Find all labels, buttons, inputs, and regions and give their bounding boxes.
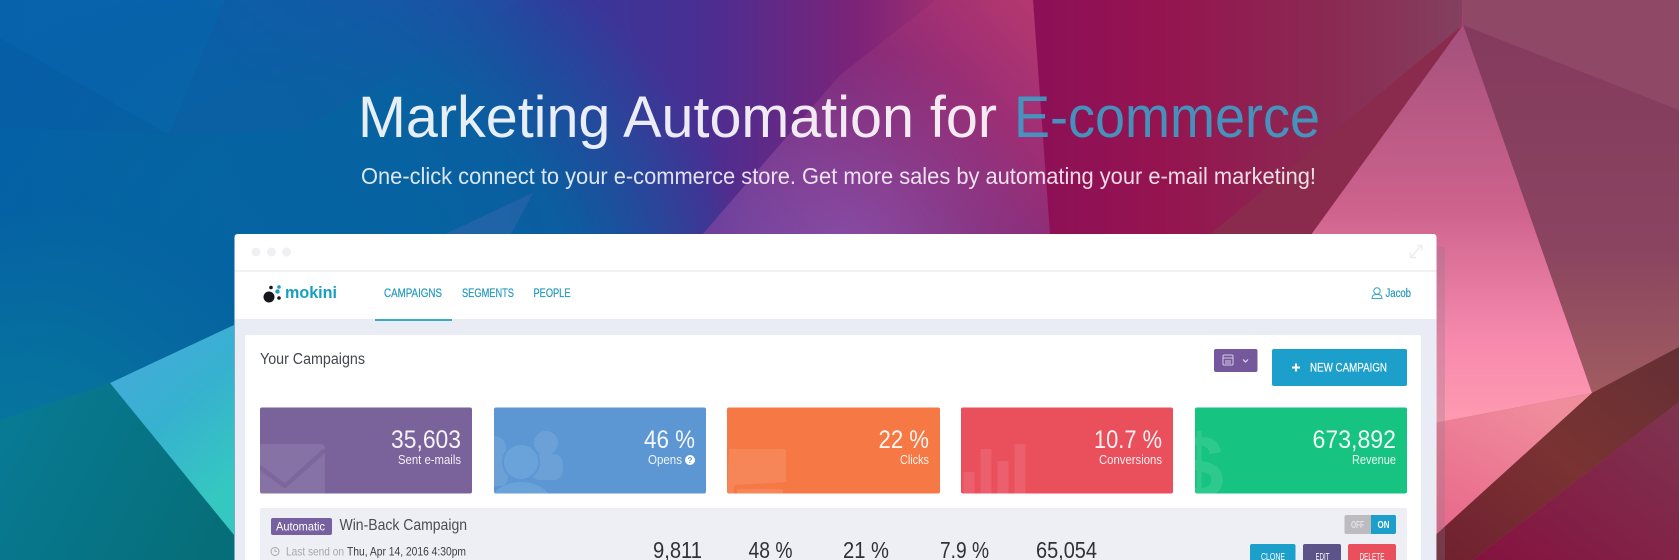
navigation bbox=[384, 288, 571, 300]
stat card: sent e-mails bbox=[258, 408, 472, 494]
stat card: conversions: 10.7 % bbox=[1094, 426, 1162, 454]
stat card: opens: ? bbox=[688, 456, 693, 465]
on/off toggle: OFF bbox=[1351, 520, 1364, 531]
on/off toggle: ON bbox=[1378, 520, 1390, 531]
stat card: conversions: Conversions bbox=[1099, 452, 1162, 467]
subtitle: One-click connect to your e-commerce store. Get more sales by automating your e-mail marketing! bbox=[361, 163, 1316, 189]
automatic badge: Automatic bbox=[276, 520, 325, 534]
stat card: sent e-mails: Sent e-mails bbox=[398, 452, 461, 467]
active tab underline bbox=[375, 319, 452, 321]
title bbox=[358, 85, 1320, 150]
delete button bbox=[1348, 544, 1396, 560]
window shadow bbox=[1437, 247, 1445, 560]
logo bbox=[264, 283, 337, 302]
stat card: clicks bbox=[727, 408, 940, 495]
last send: Last send on bbox=[286, 544, 344, 558]
campaign stats bbox=[653, 537, 1097, 560]
content background bbox=[234, 319, 1436, 560]
title: E-commerce bbox=[1014, 85, 1320, 150]
navigation: SEGMENTS bbox=[462, 288, 514, 300]
stat card: opens: 46 % bbox=[644, 426, 695, 454]
stat card: revenue: $ bbox=[1174, 418, 1224, 518]
campaigns panel bbox=[245, 335, 1421, 560]
last send bbox=[271, 544, 466, 558]
stat card: clicks: 22 % bbox=[878, 426, 929, 454]
navigation: CAMPAIGNS bbox=[384, 288, 442, 300]
stat card: conversions bbox=[961, 408, 1173, 494]
stat card: revenue bbox=[1195, 408, 1407, 494]
stat card: revenue: 673,892 bbox=[1312, 426, 1396, 454]
app window bbox=[234, 234, 1436, 560]
user: Jacob bbox=[1386, 288, 1411, 300]
window title bar bbox=[234, 246, 1436, 272]
stat card: clicks: Clicks bbox=[900, 452, 929, 467]
user bbox=[1372, 288, 1411, 300]
logo: mokini bbox=[285, 283, 337, 302]
navigation: PEOPLE bbox=[534, 288, 571, 300]
stat card: opens: Opens bbox=[648, 452, 682, 467]
title: Marketing Automation for bbox=[358, 85, 997, 150]
new campaign button bbox=[1272, 349, 1407, 386]
on/off toggle bbox=[1344, 515, 1396, 534]
new campaign button: NEW CAMPAIGN bbox=[1310, 362, 1387, 374]
clone button bbox=[1250, 544, 1296, 560]
heading: Your Campaigns bbox=[260, 351, 365, 368]
stat card: opens bbox=[494, 408, 706, 494]
stat card: sent e-mails: 35,603 bbox=[391, 426, 461, 454]
date button bbox=[1214, 349, 1258, 372]
campaign name: Win-Back Campaign bbox=[340, 517, 467, 534]
edit button bbox=[1303, 544, 1341, 560]
last send: Thu, Apr 14, 2016 4:30pm bbox=[347, 544, 466, 558]
campaign row bbox=[260, 508, 1407, 560]
stat card: revenue: Revenue bbox=[1352, 452, 1396, 467]
